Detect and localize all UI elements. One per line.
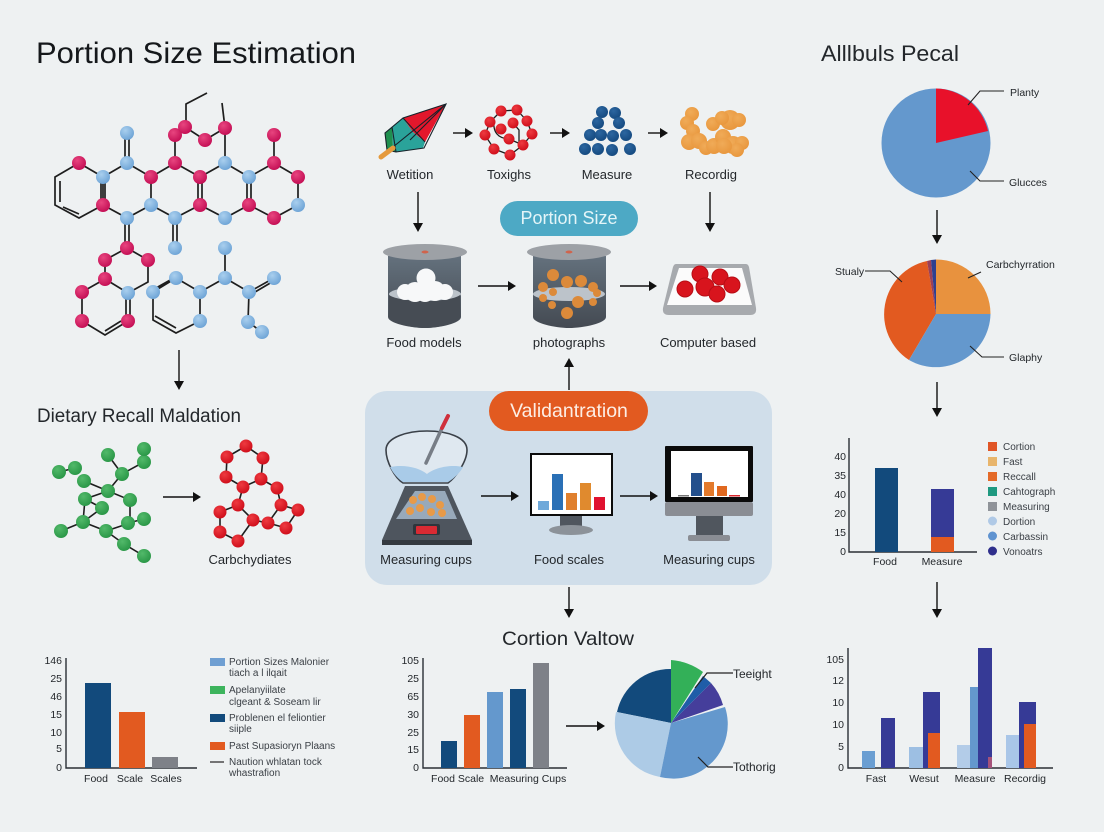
bar chart: bottom center (401, 655, 567, 785)
bar chart: bottom left: 146 (44, 655, 62, 667)
bar chart: bottom right: Recordig (1004, 773, 1046, 785)
bar chart: bottom left: 10 (50, 727, 62, 739)
arrow: panel to chart (564, 587, 574, 618)
legend: middle right: Cortion (1003, 442, 1035, 453)
bar chart: bottom center: Scale (458, 773, 484, 785)
pie chart: middle right: Stualy (835, 266, 865, 278)
bar chart: middle right: 20 (834, 508, 846, 520)
legend: bottom left: siiple (229, 724, 252, 735)
icon: beaker food models (383, 244, 467, 328)
label: Measure (582, 167, 632, 182)
bar chart: bottom left: Scale (117, 773, 143, 785)
bar chart: bottom right: Measure (955, 773, 996, 785)
arrow: molecule to recall (174, 350, 184, 390)
pill: portion size: Portion Size (520, 208, 618, 228)
bar chart: middle right: 15 (834, 527, 846, 539)
pill: validation (489, 391, 648, 431)
bar chart: bottom right: 105 (826, 654, 844, 666)
pie chart: middle right: Glaphy (1009, 352, 1043, 364)
bar chart: bottom right: 10 (832, 719, 844, 731)
pill: validation: Validantration (510, 400, 628, 422)
icon: green molecule (52, 442, 151, 563)
legend: bottom left: clgeant & Soseam lir (229, 697, 321, 708)
label: photographs (533, 335, 606, 350)
arrow: up to photographs (564, 358, 574, 390)
bar chart: bottom center: Food (431, 773, 455, 785)
legend: middle right: Reccall (1003, 472, 1036, 483)
legend: bottom left: Portion Sizes Malonier (229, 657, 330, 668)
arrow (620, 281, 657, 291)
legend: middle right: Carbassin (1003, 532, 1048, 543)
legend: middle right: Fast (1003, 457, 1023, 468)
legend: middle right: Measuring (1003, 502, 1050, 513)
legend: bottom left: Apelanyiilate (229, 685, 286, 696)
arrow (481, 491, 519, 501)
bar chart: bottom center: 0 (413, 762, 419, 774)
bar chart: bottom left: Food (84, 773, 108, 785)
bar chart: bottom left: 5 (56, 743, 62, 755)
bar chart: bottom left: 46 (50, 691, 62, 703)
bar chart: bottom right (826, 648, 1053, 785)
arrow (453, 128, 473, 138)
pie chart: top right: Planty (1010, 87, 1040, 99)
bar chart: bottom left: 25 (50, 673, 62, 685)
legend: bottom left: Naution whlatan tock (229, 757, 323, 768)
arrow (620, 491, 658, 501)
legend: bottom left: whastrafion (228, 768, 280, 779)
legend: middle right: Vonoatrs (1003, 547, 1042, 558)
pie chart: middle right (835, 259, 1055, 367)
icon: large molecule (55, 93, 305, 339)
bar chart: bottom right: 0 (838, 762, 844, 774)
arrow (413, 192, 423, 232)
bar chart: middle right: 40 (834, 451, 846, 463)
icon: tray (663, 264, 756, 315)
pie chart: top right (882, 87, 1047, 198)
label: Wetition (387, 167, 433, 182)
bar chart: bottom right: 5 (838, 741, 844, 753)
icon: orange cluster (680, 107, 749, 157)
icon: monitor with chart (531, 454, 612, 535)
label: Recordig (685, 167, 737, 182)
pie chart: top right: Glucces (1009, 177, 1047, 189)
icon: kitchen scale (382, 416, 472, 545)
label: Food models (386, 335, 462, 350)
label: carbohydrates: Carbchydiates (208, 552, 292, 567)
bar chart: bottom right: 10 (832, 697, 844, 709)
icon: desktop monitor (665, 446, 753, 541)
legend: middle right (988, 442, 1055, 558)
icon: red cluster (480, 104, 538, 160)
legend: middle right: Cahtograph (1003, 487, 1055, 498)
heading: pie column: Alllbuls Pecal (821, 41, 959, 66)
legend: bottom left: tiach a l ilqait (229, 668, 287, 679)
arrow (932, 382, 942, 417)
bar chart: bottom right: Wesut (909, 773, 939, 785)
heading: dietary recall: Dietary Recall Maldation (37, 406, 241, 427)
arrow (648, 128, 668, 138)
legend: bottom left: Problenen el feliontier (229, 713, 326, 724)
pie chart: bottom center (615, 660, 776, 779)
pie chart: middle right: Carbchyrration (986, 259, 1055, 271)
bar chart: bottom center: 25 (407, 727, 419, 739)
arrow (478, 281, 516, 291)
bar chart: bottom center: 25 (407, 673, 419, 685)
icon: beaker photographs (527, 244, 611, 328)
icon: kite (381, 104, 446, 157)
pie chart: bottom center: Teeight (733, 667, 772, 681)
label: Computer based (660, 335, 756, 350)
arrow (932, 210, 942, 244)
bar chart: middle right: Food (873, 556, 897, 568)
pie chart: bottom center: Tothorig (733, 760, 776, 774)
bar chart: middle right: 40 (834, 489, 846, 501)
bar chart: bottom left: Scales (150, 773, 182, 785)
pill: portion size (500, 201, 638, 236)
arrow: bars to pie (566, 721, 605, 731)
bar chart: bottom right: Fast (866, 773, 886, 785)
title: Portion Size Estimation (36, 37, 356, 70)
bar chart: bottom center: 30 (407, 709, 419, 721)
legend: bottom left (210, 657, 335, 779)
arrow (550, 128, 570, 138)
bar chart: bottom left (44, 655, 197, 785)
bar chart: middle right: Measure (922, 556, 963, 568)
bar chart: bottom center: 105 (401, 655, 419, 667)
label: Measuring cups (663, 552, 755, 567)
arrow: green to red molecule (163, 492, 201, 502)
legend: middle right: Dortion (1003, 517, 1035, 528)
bar chart: bottom center: Measuring Cups (490, 773, 566, 785)
panel: validation (365, 391, 772, 585)
bar chart: bottom center: 15 (407, 744, 419, 756)
bar chart: middle right: 35 (834, 470, 846, 482)
bar chart: bottom left: 0 (56, 762, 62, 774)
bar chart: middle right: 0 (840, 546, 846, 558)
icon: red molecule (214, 440, 304, 548)
bar chart: middle right (834, 438, 977, 568)
bar chart: bottom right: 12 (832, 675, 844, 687)
icon: navy cluster (579, 106, 636, 156)
legend: bottom left: Past Supasioryn Plaans (229, 741, 335, 752)
label: Toxighs (487, 167, 532, 182)
arrow (932, 582, 942, 618)
label: Measuring cups (380, 552, 472, 567)
heading: center chart: Cortion Valtow (502, 628, 635, 650)
bar chart: bottom center: 65 (407, 691, 419, 703)
arrow (705, 192, 715, 232)
label: Food scales (534, 552, 605, 567)
bar chart: bottom left: 15 (50, 709, 62, 721)
